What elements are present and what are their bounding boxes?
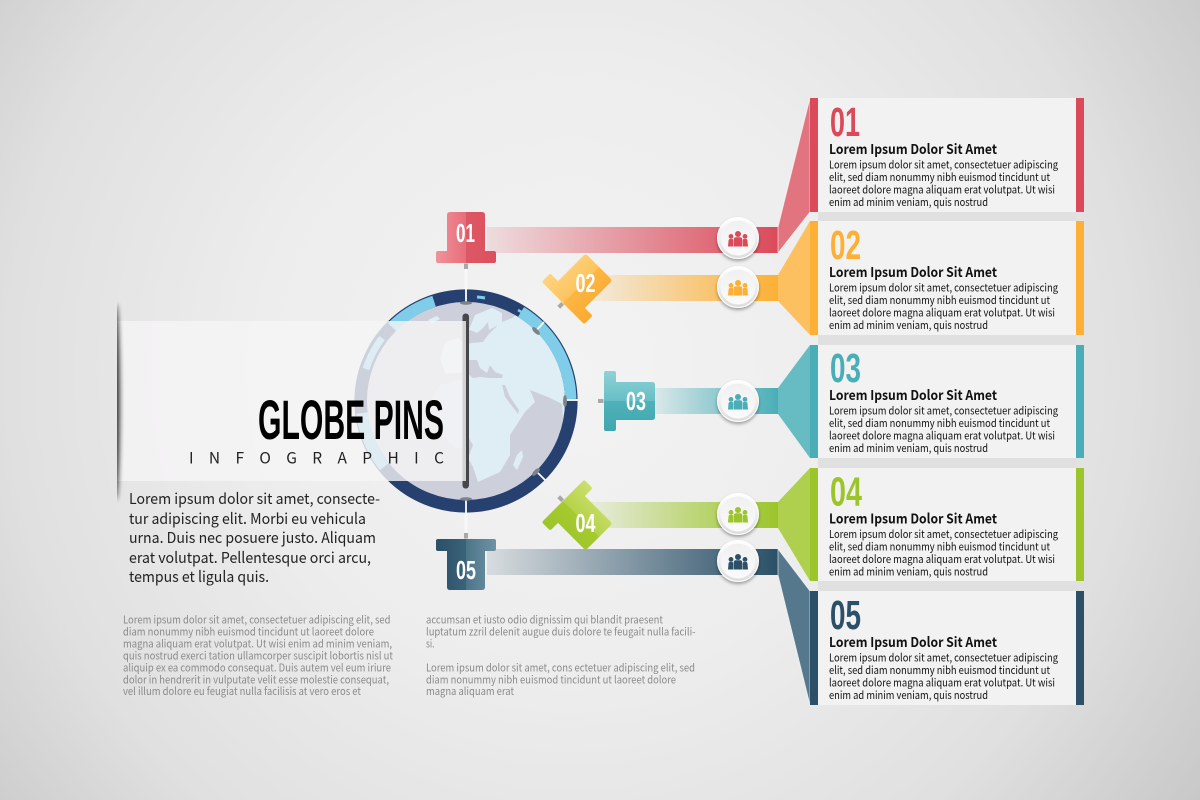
card 04 [810, 468, 1084, 591]
pin 01 [436, 212, 496, 269]
card 04: laoreet dolore magna aliquam erat volutpat. Ut wisi [829, 551, 1055, 567]
pin 02 [538, 246, 620, 328]
footer text column 1: diam nonummy nibh euismod tincidunt ut laoreet dolore [123, 624, 374, 640]
card 05 [810, 591, 1084, 705]
icon circle 1 [718, 218, 758, 258]
footer text column 1: magna aliquam erat volutpat. Ut wisi enim ad minim veniam, [123, 636, 392, 652]
card 01: elit, sed diam nonummy nibh euismod tincidunt ut [829, 169, 1050, 185]
card 02: laoreet dolore magna aliquam erat volutpat. Ut wisi [829, 304, 1055, 320]
intro paragraph: urna. Duis nec posuere justo. Aliquam [129, 527, 376, 548]
footer text column 2: si. [426, 636, 435, 652]
card 03 [810, 345, 1084, 468]
card 03: 03 [830, 345, 861, 391]
ring white gaps [466, 288, 578, 514]
pin 02: 02 [576, 268, 596, 298]
connector 2 [590, 221, 810, 335]
card 02: Lorem Ipsum Dolor Sit Amet [829, 261, 997, 281]
card 02: 02 [830, 222, 861, 268]
globe [355, 288, 578, 514]
footer text column 2: luptatum zzril delenit augue duis dolore te feugait nulla facili- [426, 624, 696, 640]
footer text column 1: Lorem ipsum dolor sit amet, consectetuer adipiscing elit, sed [123, 612, 390, 628]
ring light arcs [362, 297, 571, 467]
pin guide lines [464, 269, 468, 534]
title panel left shadow [117, 302, 124, 502]
card 01: Lorem Ipsum Dolor Sit Amet [829, 138, 997, 158]
connector 1 [487, 98, 810, 253]
card 04: elit, sed diam nonummy nibh euismod tincidunt ut [829, 538, 1050, 554]
card 01: laoreet dolore magna aliquam erat volutpat. Ut wisi [829, 182, 1055, 198]
pin 03 [598, 371, 655, 431]
card 05: elit, sed diam nonummy nibh euismod tincidunt ut [829, 662, 1050, 678]
card 04: enim ad minim veniam, quis nostrud [829, 564, 988, 580]
footer text column 1: aliquip ex ea commodo consequat. Duis autem vel eum iriure [123, 660, 391, 676]
globe ring [361, 296, 571, 506]
icon circle 2 [718, 266, 758, 308]
title: GLOBE PINS [258, 388, 444, 451]
card 04: 04 [830, 468, 862, 514]
pin 04: 04 [576, 508, 596, 538]
intro paragraph: Lorem ipsum dolor sit amet, consecte- [129, 488, 380, 509]
card 05: laoreet dolore magna aliquam erat volutpat. Ut wisi [829, 674, 1055, 690]
card 03: elit, sed diam nonummy nibh euismod tincidunt ut [829, 415, 1050, 431]
connector 3 [650, 345, 810, 458]
intro paragraph: tempus et ligula quis. [129, 566, 269, 587]
card 05: Lorem ipsum dolor sit amet, consectetuer adipiscing [829, 650, 1059, 666]
pin 03: 03 [626, 386, 646, 416]
pin 01: 01 [456, 218, 475, 248]
footer text column 1: dolor in hendrerit in vulputate velit esse molestie consequat, [123, 672, 389, 688]
card 05: 05 [830, 592, 861, 638]
icon circle 3 [718, 380, 758, 422]
intro paragraph [129, 488, 380, 587]
card 03: Lorem Ipsum Dolor Sit Amet [829, 384, 997, 404]
title panel [117, 321, 466, 481]
card 02 [810, 221, 1084, 345]
pin 04 [538, 476, 620, 558]
connector 4 [590, 468, 810, 581]
pin 05: 05 [456, 555, 476, 585]
footer text column 2: diam nonummy nibh euismod tincidunt ut laoreet dolore [426, 672, 676, 688]
footer text column 2: Lorem ipsum dolor sit amet, cons ectetuer adipiscing elit, sed [426, 660, 695, 676]
card 03: Lorem ipsum dolor sit amet, consectetuer adipiscing [829, 402, 1059, 418]
pin holes [460, 301, 567, 501]
card 05: Lorem Ipsum Dolor Sit Amet [829, 631, 997, 651]
footer text column 1: quis nostrud exerci tation ullamcorper suscipit lobortis nisl ut [123, 648, 393, 664]
footer text column 1: vel illum dolore eu feugiat nulla facilisis at vero eros et [123, 684, 361, 699]
card 01: enim ad minim veniam, quis nostrud [829, 194, 988, 210]
connector 5 [487, 549, 810, 705]
card 01 [810, 98, 1084, 221]
card 03: laoreet dolore magna aliquam erat volutpat. Ut wisi [829, 428, 1055, 444]
ring outline [355, 290, 577, 512]
icon circle 4 [718, 494, 758, 534]
globe axis needle [462, 314, 469, 488]
card 02: Lorem ipsum dolor sit amet, consectetuer adipiscing [829, 280, 1059, 296]
footer text column 2: magna aliquam erat [426, 684, 514, 699]
card 03: enim ad minim veniam, quis nostrud [829, 440, 988, 456]
subtitle: INFOGRAPHIC [189, 446, 444, 468]
icon circle 5 [718, 540, 758, 582]
card 02: enim ad minim veniam, quis nostrud [829, 317, 988, 333]
intro paragraph: erat volutpat. Pellentesque orci arcu, [129, 547, 371, 568]
card 01: 01 [830, 99, 860, 145]
card 02: elit, sed diam nonummy nibh euismod tincidunt ut [829, 292, 1050, 308]
card 01: Lorem ipsum dolor sit amet, consectetuer adipiscing [829, 156, 1059, 172]
footer text column 1 [123, 612, 393, 699]
globe land masses [428, 308, 575, 482]
pin 05 [436, 533, 496, 590]
globe sea [367, 302, 565, 500]
footer text column 2: accumsan et iusto odio dignissim qui blandit praesent [426, 612, 663, 628]
card 05: enim ad minim veniam, quis nostrud [829, 687, 988, 703]
card 04: Lorem ipsum dolor sit amet, consectetuer adipiscing [829, 526, 1059, 542]
footer text column 2 [426, 612, 696, 699]
card 04: Lorem Ipsum Dolor Sit Amet [829, 508, 997, 528]
intro paragraph: tur adipiscing elit. Morbi eu vehicula [129, 508, 366, 529]
